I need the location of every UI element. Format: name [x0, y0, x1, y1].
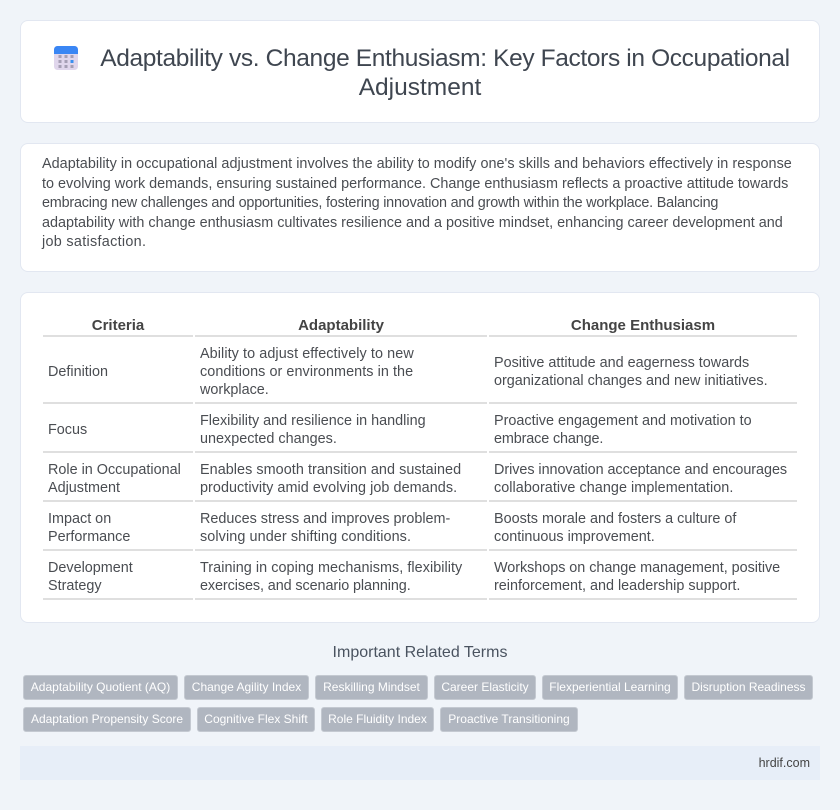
footer source: hrdif.com: [759, 756, 810, 770]
tag: Flexperiential Learning: [549, 680, 671, 694]
panel: comparison table: [20, 292, 820, 623]
text block: description: job satisfaction.: [42, 234, 146, 250]
table heading: change enthusiasm: Change Enthusiasm: [571, 317, 715, 334]
tag: [321, 707, 434, 732]
text block: description: Adaptability in occupational adjustment involves the ability to modify one's skills and behaviors effectively in response: [42, 156, 792, 172]
panel: comparison table: Proactive engagement and motivation to: [494, 413, 752, 429]
tag: Proactive Transitioning: [448, 712, 570, 726]
text block: description: adaptability with change enthusiasm cultivates resilience and a positive mindset, enhancing career development and: [42, 215, 783, 231]
tag: Reskilling Mindset: [323, 680, 420, 694]
row: development strategy: [48, 560, 133, 594]
tag: Adaptation Propensity Score: [31, 712, 183, 726]
row: development strategy: Strategy: [48, 578, 102, 594]
tag: [315, 675, 428, 700]
tag: [684, 675, 813, 700]
row: impact on performance: Impact on: [48, 511, 111, 527]
panel: comparison table: Positive attitude and eagerness towards: [494, 355, 749, 371]
panel: comparison table: solving under shifting conditions.: [200, 529, 411, 545]
title: [100, 45, 790, 101]
panel: comparison table: productivity amid evolving job demands.: [200, 480, 457, 496]
tag: Career Elasticity: [441, 680, 529, 694]
text block: description: embracing new challenges and opportunities, fostering innovation and growth within the workplace. Balancing: [42, 195, 718, 211]
panel: comparison table: Drives innovation acceptance and encourages: [494, 462, 787, 478]
row: focus: Focus: [48, 422, 87, 438]
tag: [440, 707, 578, 732]
panel: comparison table: Ability to adjust effectively to new: [200, 346, 414, 362]
panel: comparison table: workplace.: [200, 382, 269, 398]
panel: comparison table: Reduces stress and improves problem-: [200, 511, 450, 527]
panel: comparison table: Training in coping mechanisms, flexibility: [200, 560, 462, 576]
row: impact on performance: Performance: [48, 529, 130, 545]
panel: comparison table: collaborative change implementation.: [494, 480, 733, 496]
panel: comparison table: Boosts morale and fosters a culture of: [494, 511, 736, 527]
panel: comparison table: organizational changes and new initiatives.: [494, 373, 768, 389]
tag: Adaptability Quotient (AQ): [31, 680, 170, 694]
text block: description: [42, 156, 792, 250]
row: definition: Definition: [48, 364, 108, 380]
panel: comparison table: unexpected changes.: [200, 431, 337, 447]
panel: comparison table: exercises, and scenario planning.: [200, 578, 411, 594]
tag: [23, 707, 191, 732]
tag: Role Fluidity Index: [328, 712, 427, 726]
row: role in occupational adjustment: Role in Occupational: [48, 462, 181, 478]
footer: [20, 746, 820, 780]
tag: Disruption Readiness: [691, 680, 806, 694]
tag: [542, 675, 678, 700]
title: Adjustment: [359, 74, 481, 101]
panel: comparison table: reinforcement, and leadership support.: [494, 578, 740, 594]
tags: related terms: [23, 675, 813, 732]
row: role in occupational adjustment: Adjustment: [48, 480, 120, 496]
panel: comparison table: Flexibility and resilience in handling: [200, 413, 426, 429]
tag: Change Agility Index: [192, 680, 301, 694]
icon: calendar: [54, 46, 78, 70]
panel: comparison table: Workshops on change management, positive: [494, 560, 780, 576]
title: Adaptability vs. Change Enthusiasm: Key Factors in Occupational: [100, 45, 790, 72]
tag: [23, 675, 178, 700]
panel: comparison table: continuous improvement.: [494, 529, 655, 545]
table heading: adaptability: Adaptability: [298, 317, 384, 334]
row: role in occupational adjustment: [48, 462, 181, 496]
panel: header: [20, 20, 820, 123]
tag: [197, 707, 315, 732]
panel: comparison table: embrace change.: [494, 431, 603, 447]
panel: comparison table: Enables smooth transition and sustained: [200, 462, 461, 478]
row: development strategy: Development: [48, 560, 133, 576]
panel: description: [20, 143, 820, 272]
tag: Cognitive Flex Shift: [204, 712, 308, 726]
tag: [184, 675, 309, 700]
text block: description: to evolving work demands, ensuring sustained performance. Change enthusiasm reflects a proactive attitude towards: [42, 176, 788, 192]
table heading: criteria: Criteria: [92, 317, 144, 334]
row: impact on performance: [48, 511, 130, 545]
tag: [434, 675, 536, 700]
panel: comparison table: conditions or environments in the: [200, 364, 413, 380]
heading: important related terms: Important Related Terms: [333, 644, 507, 661]
